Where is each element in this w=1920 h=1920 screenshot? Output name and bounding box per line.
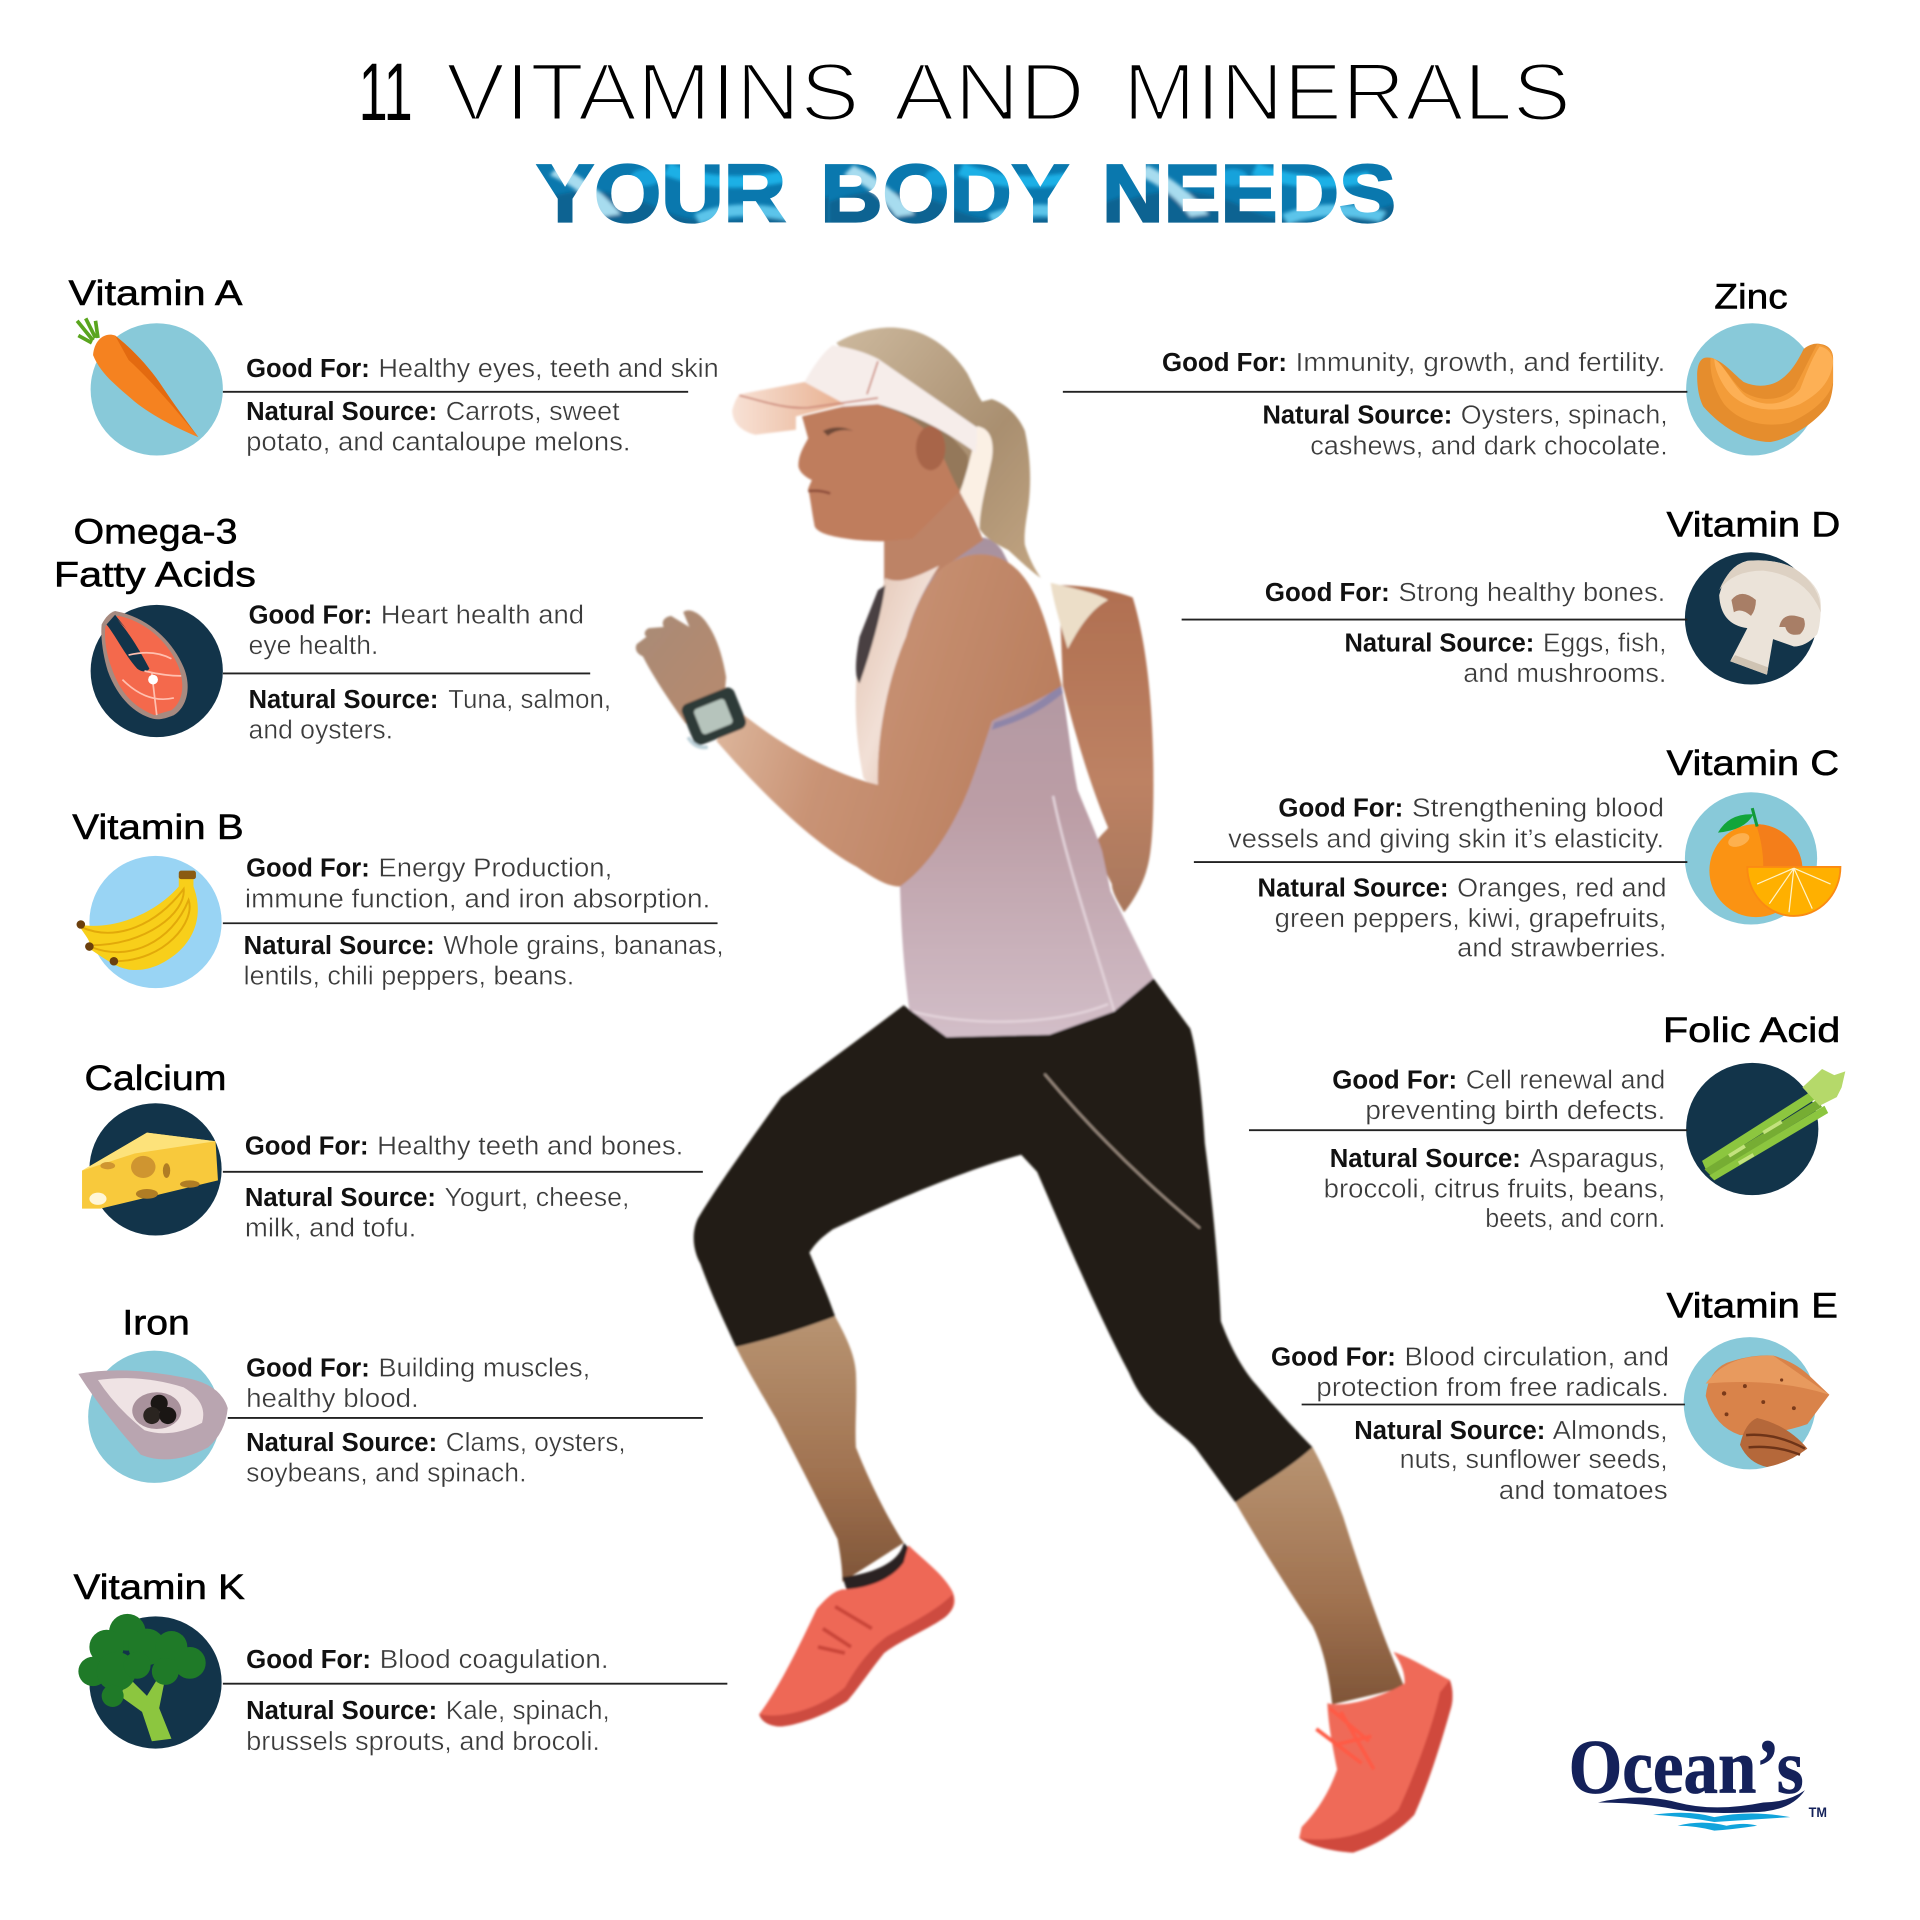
watch bbox=[680, 685, 748, 747]
text block: milk, and tofu. bbox=[245, 1215, 416, 1243]
text block bbox=[1271, 1343, 1685, 1505]
icon: salmon steak bbox=[91, 605, 223, 737]
logo: Ocean's: TM bbox=[1809, 1805, 1827, 1820]
icon: cheese bbox=[82, 1103, 222, 1236]
text block: Cell renewal and bbox=[1466, 1067, 1665, 1095]
text block: Good For: bbox=[1278, 795, 1403, 823]
heading: Vitamin K bbox=[73, 1567, 245, 1607]
panel: Iron bbox=[78, 1303, 703, 1488]
heading: Iron bbox=[122, 1303, 190, 1343]
left sock bbox=[842, 1543, 913, 1592]
text block: Natural Source: bbox=[245, 1184, 436, 1212]
text block: Almonds, bbox=[1553, 1417, 1668, 1445]
text block: Blood circulation, and bbox=[1404, 1343, 1669, 1371]
text block bbox=[1182, 579, 1687, 688]
text block: potato, and cantaloupe melons. bbox=[246, 429, 631, 457]
title: YOUR bbox=[536, 149, 786, 240]
text block bbox=[1063, 349, 1687, 460]
icon: mushroom bbox=[1685, 552, 1821, 684]
title: BODY bbox=[820, 149, 1069, 240]
face bbox=[798, 394, 961, 541]
panel: Folic Acid bbox=[1249, 1010, 1845, 1233]
heading bbox=[54, 512, 256, 595]
heading: Vitamin A bbox=[69, 273, 243, 313]
text block: Oysters, spinach, bbox=[1461, 402, 1668, 430]
text block bbox=[223, 601, 611, 744]
visor bill bbox=[732, 382, 845, 435]
text block bbox=[223, 1646, 727, 1756]
icon: almonds bbox=[1684, 1337, 1829, 1469]
text block: Good For: bbox=[1265, 579, 1390, 607]
text block: Heart health and bbox=[381, 601, 584, 629]
text block: Good For: bbox=[246, 355, 370, 383]
text block: and oysters. bbox=[249, 716, 393, 744]
icon: oyster with pearls bbox=[78, 1351, 228, 1483]
heading: Vitamin C bbox=[1667, 743, 1839, 783]
text block: and strawberries. bbox=[1457, 934, 1667, 962]
title bbox=[359, 47, 1571, 240]
text block: Good For: bbox=[1332, 1067, 1457, 1095]
front arm bbox=[716, 554, 1062, 887]
title: NEEDS bbox=[1102, 149, 1396, 240]
hair and ponytail bbox=[836, 328, 1041, 578]
hair bloom highlight bbox=[960, 426, 993, 529]
panel: Vitamin A bbox=[69, 273, 719, 457]
ear bbox=[916, 426, 945, 470]
back arm bbox=[1059, 585, 1153, 912]
text block bbox=[223, 855, 724, 990]
visor band bbox=[804, 345, 977, 453]
right shoe bbox=[1299, 1652, 1453, 1853]
text block: Natural Source: bbox=[246, 1697, 437, 1725]
text block: Natural Source: bbox=[244, 932, 435, 960]
icon: orange bbox=[1685, 792, 1840, 924]
panel: Vitamin D bbox=[1182, 504, 1840, 688]
title: VITAMINS bbox=[446, 47, 860, 138]
icon: bananas bbox=[77, 856, 222, 988]
text block: Energy Production, bbox=[378, 855, 612, 883]
text block: Immunity, growth, and fertility. bbox=[1296, 349, 1665, 377]
left shoe bbox=[759, 1545, 955, 1727]
text block: Strong healthy bones. bbox=[1398, 579, 1665, 607]
text block: Natural Source: bbox=[246, 398, 437, 426]
text block: protection from free radicals. bbox=[1316, 1374, 1669, 1402]
text block: Good For: bbox=[1162, 349, 1287, 377]
text block: eye health. bbox=[249, 632, 378, 660]
panel: Vitamin E bbox=[1271, 1286, 1838, 1505]
text block: Good For: bbox=[245, 1133, 369, 1161]
text block: Healthy teeth and bones. bbox=[377, 1133, 683, 1161]
sports bra edge bbox=[992, 683, 1063, 730]
leggings bbox=[694, 978, 1313, 1502]
text block: Good For: bbox=[246, 855, 370, 883]
text block: Tuna, salmon, bbox=[448, 686, 611, 714]
text block: Blood coagulation. bbox=[380, 1646, 609, 1674]
panel: Calcium bbox=[82, 1058, 703, 1243]
eye and brow bbox=[823, 427, 853, 436]
text block: Natural Source: bbox=[1344, 629, 1534, 657]
text block: Natural Source: bbox=[246, 1429, 437, 1457]
hair under visor bbox=[882, 402, 968, 490]
text block bbox=[223, 355, 719, 457]
text block: cashews, and dark chocolate. bbox=[1310, 432, 1668, 460]
heading: Fatty Acids bbox=[54, 555, 256, 595]
text block: Clams, oysters, bbox=[446, 1429, 626, 1457]
title: 11 bbox=[359, 47, 413, 138]
text block: Good For: bbox=[1271, 1343, 1396, 1371]
panel: Vitamin B bbox=[72, 807, 724, 990]
text block: Eggs, fish, bbox=[1543, 629, 1667, 657]
text block: Natural Source: bbox=[1262, 402, 1452, 430]
text block: Good For: bbox=[246, 1354, 370, 1382]
text block: beets, and corn. bbox=[1485, 1205, 1665, 1233]
hair tuft over back arm bbox=[1051, 583, 1108, 649]
panel: Zinc bbox=[1063, 277, 1833, 460]
title: AND bbox=[894, 47, 1085, 138]
text block: lentils, chili peppers, beans. bbox=[244, 962, 574, 990]
text block: brussels sprouts, and brocoli. bbox=[246, 1728, 600, 1756]
title: MINERALS bbox=[1123, 47, 1571, 138]
panel: Vitamin K bbox=[73, 1567, 727, 1756]
chest highlight bbox=[856, 566, 939, 785]
heading: Calcium bbox=[84, 1058, 227, 1098]
text block: Natural Source: bbox=[1354, 1417, 1545, 1445]
text block: Yogurt, cheese, bbox=[444, 1184, 629, 1212]
icon: broccoli bbox=[78, 1614, 222, 1749]
text block: Natural Source: bbox=[1258, 874, 1449, 902]
heading: Folic Acid bbox=[1663, 1010, 1840, 1050]
text block bbox=[1194, 795, 1687, 962]
text block: Natural Source: bbox=[1330, 1145, 1521, 1173]
text block: Carrots, sweet bbox=[446, 398, 620, 426]
text block: Asparagus, bbox=[1529, 1145, 1665, 1173]
neck bbox=[884, 484, 983, 624]
text block: soybeans, and spinach. bbox=[246, 1460, 527, 1488]
heading: Vitamin D bbox=[1667, 504, 1840, 544]
watch strap bbox=[688, 737, 708, 747]
right calf bbox=[1236, 1447, 1404, 1704]
heading: Zinc bbox=[1714, 277, 1788, 317]
text block: Strengthening blood bbox=[1412, 795, 1664, 823]
text block bbox=[223, 1133, 703, 1243]
hand bbox=[636, 610, 726, 724]
text block bbox=[1249, 1067, 1687, 1233]
icon: asparagus bbox=[1686, 1063, 1845, 1195]
tank seam bbox=[912, 796, 1114, 1022]
panel: Vitamin C bbox=[1194, 743, 1840, 962]
heading: Vitamin B bbox=[72, 807, 244, 847]
text block: and tomatoes bbox=[1499, 1477, 1668, 1505]
text block: Building muscles, bbox=[378, 1354, 590, 1382]
runner photo bbox=[636, 328, 1453, 1853]
left calf bbox=[736, 1316, 904, 1582]
icon: carrot bbox=[77, 318, 223, 456]
text block: immune function, and iron absorption. bbox=[245, 885, 710, 913]
text block: Good For: bbox=[246, 1646, 371, 1674]
text block: Healthy eyes, teeth and skin bbox=[378, 355, 719, 383]
heading: Omega-3 bbox=[73, 512, 238, 552]
text block: Oranges, red and bbox=[1457, 874, 1667, 902]
text block: Kale, spinach, bbox=[446, 1697, 610, 1725]
text block: Natural Source: bbox=[249, 686, 438, 714]
text block: preventing birth defects. bbox=[1365, 1097, 1665, 1125]
text block: and mushrooms. bbox=[1463, 660, 1667, 688]
logo: Ocean's: Ocean’s bbox=[1569, 1724, 1804, 1810]
text block: nuts, sunflower seeds, bbox=[1400, 1446, 1668, 1474]
text block: healthy blood. bbox=[246, 1385, 419, 1413]
text block: broccoli, citrus fruits, beans, bbox=[1324, 1176, 1665, 1204]
tank top bbox=[863, 538, 1153, 1038]
heading: Vitamin E bbox=[1667, 1286, 1838, 1326]
icon: cashew bbox=[1686, 323, 1833, 456]
leggings seam bbox=[1044, 1074, 1200, 1228]
panel: Omega-3 Fatty Acids bbox=[54, 512, 611, 744]
text block bbox=[228, 1354, 703, 1488]
text block: green peppers, kiwi, grapefruits, bbox=[1275, 905, 1667, 933]
mouth bbox=[808, 491, 830, 493]
text block: vessels and giving skin it’s elasticity. bbox=[1228, 825, 1664, 853]
text block: Good For: bbox=[249, 601, 372, 629]
text block: Whole grains, bananas, bbox=[443, 932, 724, 960]
